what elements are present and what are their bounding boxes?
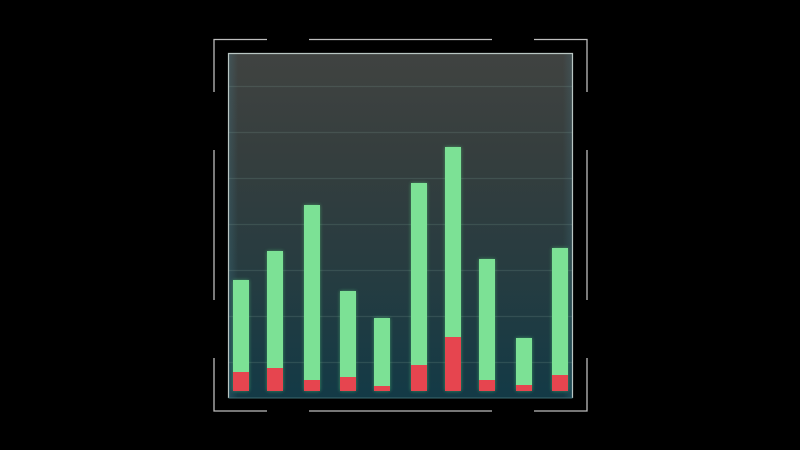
bar 6 (411, 183, 427, 391)
bar 9 (516, 338, 532, 391)
bar 8 (479, 259, 495, 391)
bar 7 (445, 147, 461, 391)
bar chart (233, 147, 568, 391)
bar 4 (340, 291, 356, 391)
bar 2 (267, 251, 283, 391)
bar glow (233, 147, 568, 391)
bar 1 (233, 280, 249, 391)
bar 10 (552, 248, 568, 391)
bar 5 (374, 318, 390, 391)
chart panel (228, 54, 572, 398)
bar 3 (304, 205, 320, 391)
outer bracket frame (214, 40, 587, 411)
